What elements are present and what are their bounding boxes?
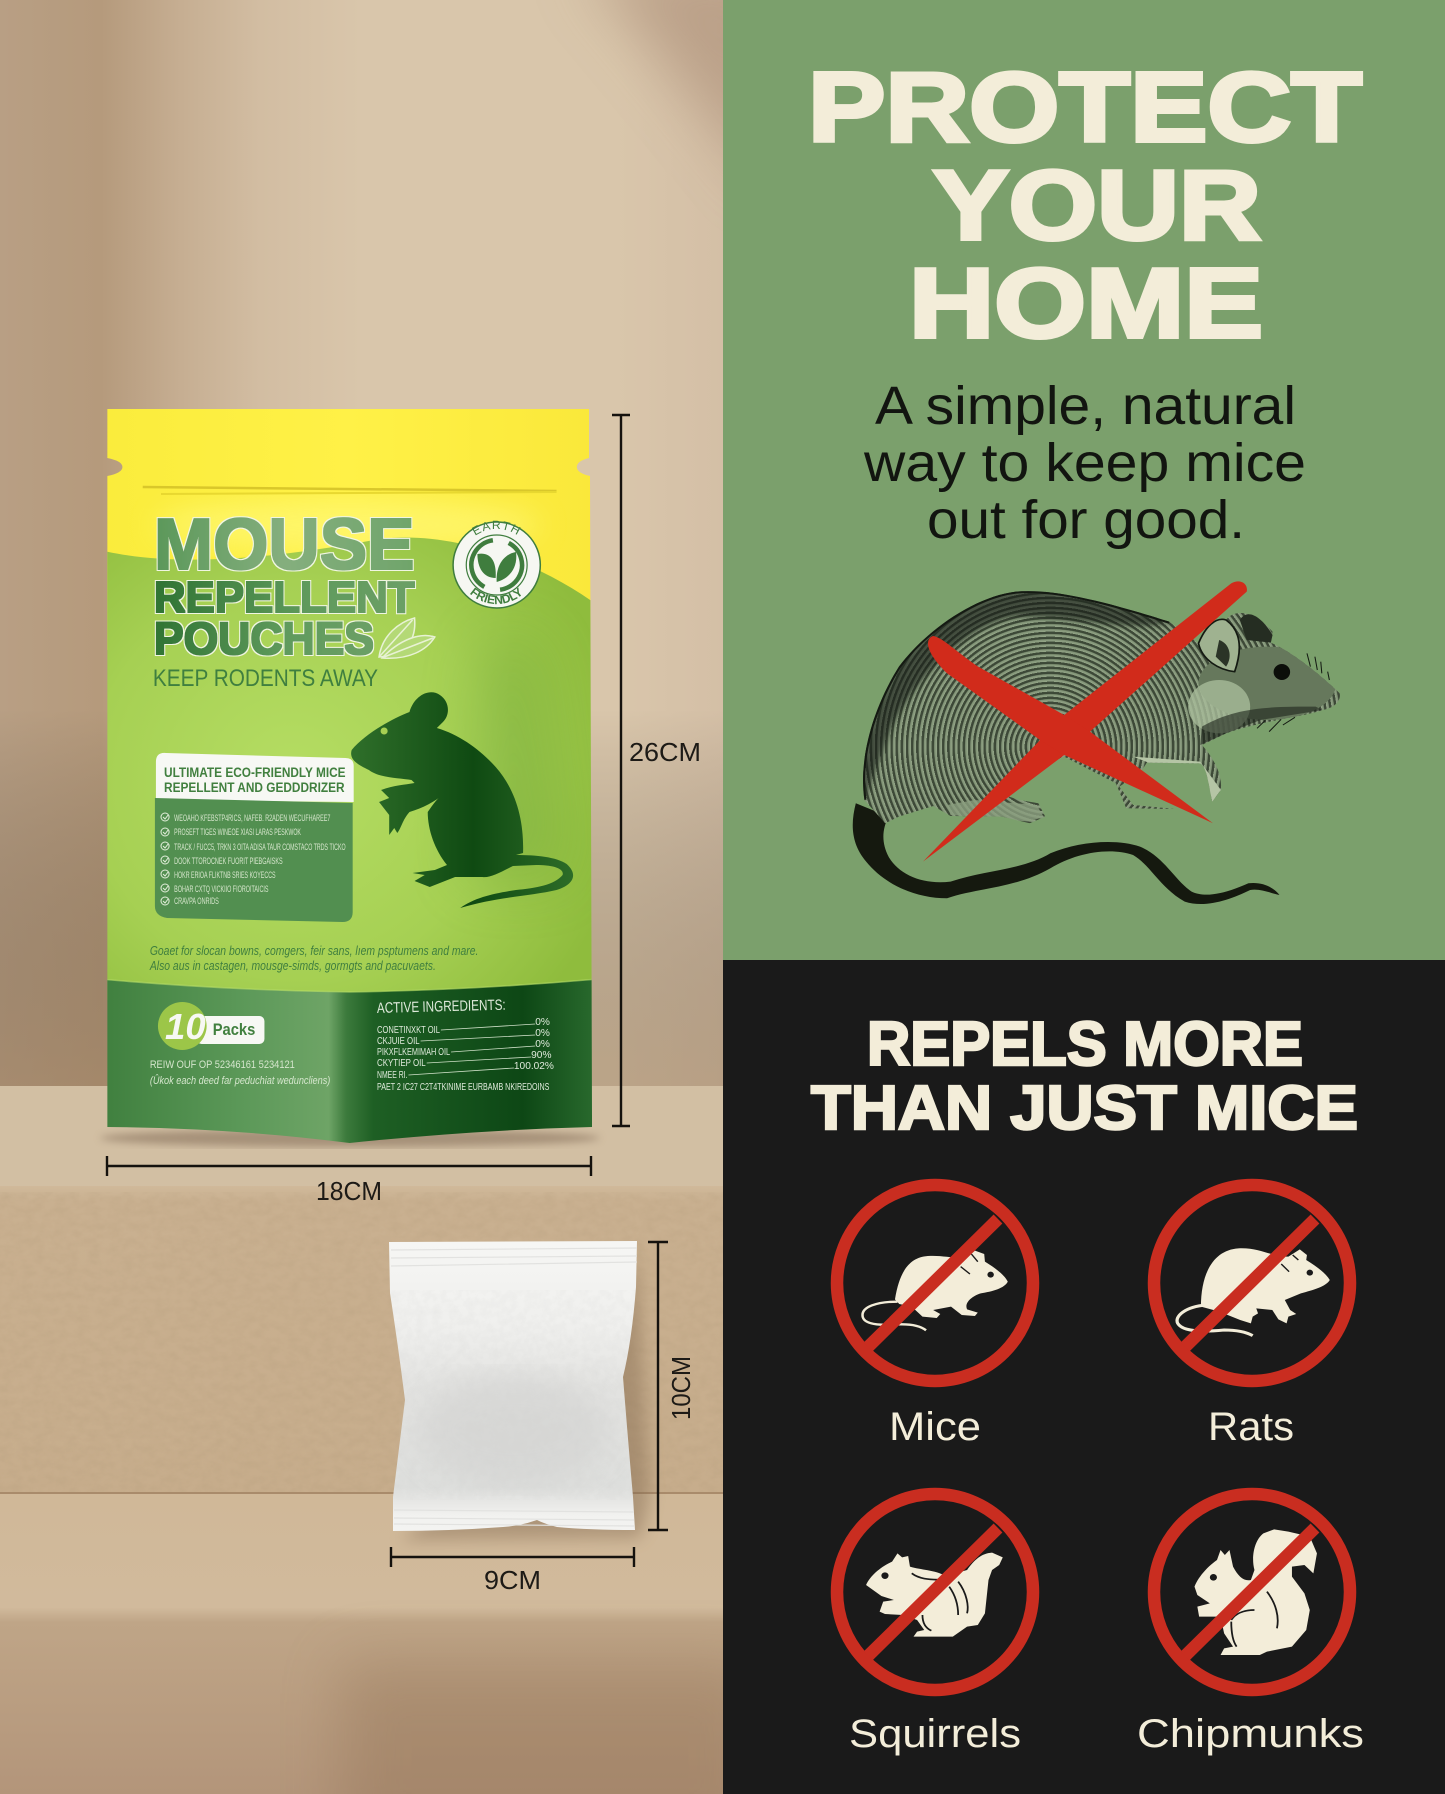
rat body bbox=[863, 591, 1340, 824]
pouch feature box: TRACK / FUCC5, TRKN 3 OITA ADISA TAUR COMSTACO TRDS TICKO bbox=[174, 842, 346, 852]
pouch batch text: (Ûkok each deed far peduchiat weduncliens) bbox=[150, 1074, 331, 1087]
badge: earth friendly: FRIENDLY bbox=[470, 587, 521, 604]
pouch zip seal bbox=[143, 487, 557, 491]
badge: earth friendly: EARTH bbox=[472, 520, 521, 536]
rat whiskers bbox=[1257, 653, 1329, 732]
pouch tagline: KEEP RODENTS AWAY bbox=[153, 665, 378, 692]
pouch active ingredients: CKYTIEP OIL bbox=[377, 1058, 426, 1069]
pouch feature box: HOKR ERIOA FLIKTNB SRIES KOYECCS bbox=[174, 870, 276, 880]
pouch feature box: WEOAHO KFEBSTP4RICS, NAFEB. R2ADEN WECUFHAREE7 bbox=[174, 813, 330, 823]
label: mice: Mice bbox=[889, 1405, 981, 1449]
pouch dark green band bbox=[100, 979, 597, 1150]
pouch feature box: CRAVPA ONRIDS bbox=[174, 896, 219, 906]
dimension: pouch width 18cm bbox=[107, 1156, 591, 1206]
pouch title: POUCHES bbox=[154, 613, 374, 664]
product: large repellent pouch bbox=[107, 409, 592, 1143]
rat eye bbox=[1274, 664, 1290, 680]
pouch yellow top bbox=[100, 400, 597, 650]
icon: no squirrels bbox=[837, 1494, 1033, 1690]
red cross bbox=[923, 581, 1247, 862]
pouch usage text: Goaet for slocan bowns, comgers, feir sans, lıem psptumens and mare. bbox=[150, 944, 478, 958]
icon: no rats bbox=[1154, 1185, 1350, 1381]
pouch active ingredients: CONETINXKT OIL bbox=[377, 1025, 440, 1036]
dimension: sachet width 9cm: 9CM bbox=[484, 1565, 541, 1595]
pouch leaves bbox=[379, 618, 435, 658]
pouch feature box: PROSEFT TIGES WINEOE XIASI LARAS PESKWOK bbox=[174, 827, 301, 837]
heading: protect your home: YOUR bbox=[933, 150, 1261, 260]
subtitle: out for good. bbox=[927, 490, 1245, 550]
pouch title bbox=[154, 504, 415, 664]
pouch active ingredients: PIKXFLKEMIMAH OIL bbox=[377, 1047, 450, 1058]
pouch usage text: Also aus in castagen, mousge-simds, gormgts and pacuvaets. bbox=[149, 959, 436, 973]
shadow under pouch bbox=[100, 1129, 600, 1147]
heading: repels more than just mice bbox=[811, 1010, 1358, 1143]
dimension: sachet height 10cm: 10CM bbox=[666, 1356, 696, 1420]
subtitle: way to keep mice bbox=[863, 433, 1306, 493]
pouch active ingredients: 100.02% bbox=[514, 1061, 554, 1072]
rat tail bbox=[853, 803, 1279, 904]
heading: protect your home: PROTECT bbox=[808, 52, 1362, 162]
heading: protect your home bbox=[808, 52, 1362, 358]
pouch mouse silhouette bbox=[351, 692, 573, 908]
dimension: pouch width 18cm: 18CM bbox=[316, 1176, 382, 1206]
shadow behind sachet bbox=[400, 1250, 650, 1540]
pouch pack count: Packs bbox=[213, 1020, 255, 1039]
panel: product photo background bbox=[0, 0, 780, 1794]
pouch active ingredients: 0% bbox=[535, 1039, 550, 1050]
pouch active ingredients: NMEE RI. bbox=[377, 1070, 407, 1081]
dimension: pouch height 26cm: 26CM bbox=[629, 737, 701, 767]
pouch active ingredients: 90% bbox=[531, 1050, 552, 1061]
pouch pack count: 10 bbox=[165, 1006, 206, 1047]
subtitle: A simple, natural bbox=[875, 376, 1296, 436]
illustration: crossed-out engraved rat bbox=[851, 580, 1350, 904]
pouch feature box: ULTIMATE ECO-FRIENDLY MICE bbox=[164, 764, 346, 780]
heading: protect your home: HOME bbox=[909, 248, 1263, 358]
pouch batch text bbox=[150, 1059, 331, 1087]
label: rats: Rats bbox=[1208, 1405, 1294, 1449]
pouch pack count bbox=[158, 1002, 264, 1050]
pouch active ingredients: 0% bbox=[535, 1028, 550, 1039]
product: small white sachet bbox=[385, 1241, 641, 1531]
dimension: sachet width 9cm bbox=[391, 1547, 634, 1595]
pouch feature box: REPELLENT AND GEDDDRIZER bbox=[164, 779, 345, 795]
heading: repels more than just mice: THAN JUST MICE bbox=[811, 1074, 1358, 1143]
panel: green hero bbox=[723, 0, 1445, 960]
pouch feature box: BOHAR CXTQ VICKIIO FIOROITAICIS bbox=[174, 884, 268, 894]
pouch title: MOUSE bbox=[154, 504, 415, 585]
pouch feature box bbox=[155, 753, 354, 922]
rat ear bbox=[1199, 619, 1239, 672]
label: chipmunks: Chipmunks bbox=[1137, 1712, 1364, 1756]
icon: no chipmunks bbox=[1154, 1494, 1350, 1690]
pouch usage text bbox=[149, 944, 478, 973]
pouch active ingredients: ACTIVE INGREDIENTS: bbox=[377, 997, 506, 1017]
pouch feature box: DOOK TTOROCNEK FUORIT PIEBGAISKS bbox=[174, 856, 283, 866]
pouch green middle bbox=[100, 537, 597, 1000]
dimension: pouch height 26cm bbox=[612, 415, 701, 1126]
dimension: sachet height 10cm bbox=[648, 1242, 696, 1530]
badge: earth friendly bbox=[452, 520, 542, 609]
pouch active ingredients bbox=[377, 997, 554, 1093]
heading: repels more than just mice: REPELS MORE bbox=[867, 1010, 1303, 1079]
panel: black species panel bbox=[723, 960, 1445, 1794]
subtitle bbox=[863, 376, 1306, 550]
pouch active ingredients: CKJUIE OIL bbox=[377, 1036, 420, 1047]
pouch active ingredients: 0% bbox=[535, 1017, 550, 1028]
pouch title: REPELLENT bbox=[154, 573, 415, 622]
icon: no mice bbox=[837, 1185, 1033, 1381]
label: squirrels: Squirrels bbox=[849, 1712, 1021, 1756]
pouch active ingredients: PAET 2 IC27 C2T4TKINIME EURBAMB NKIREDOINS bbox=[377, 1082, 550, 1093]
pouch batch text: REIW OUF OP 52346161 5234121 bbox=[150, 1059, 295, 1071]
